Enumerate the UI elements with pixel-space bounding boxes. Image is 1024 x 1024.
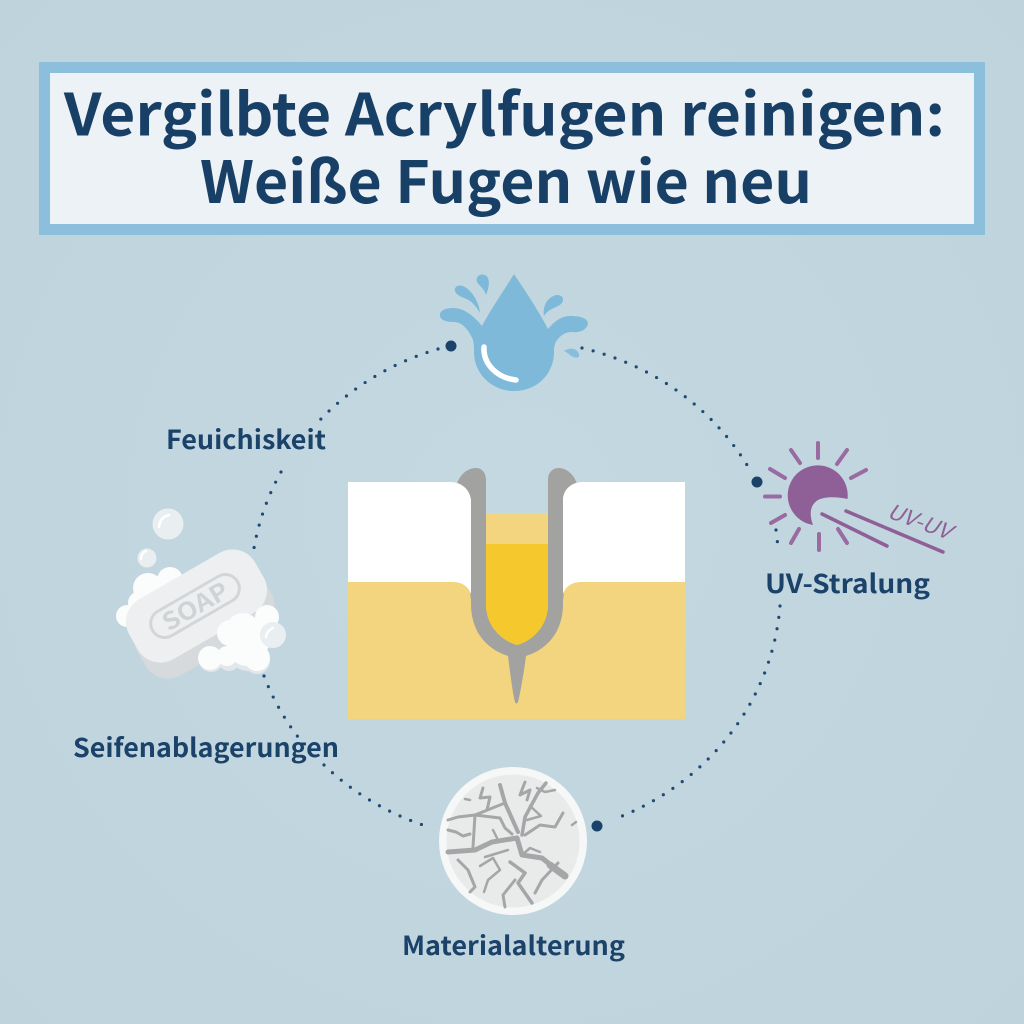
- icon: soap bar: [116, 508, 286, 688]
- UV beam label: UV-UV: [884, 495, 960, 548]
- drop highlight: [484, 347, 516, 380]
- label: Seifenablagerungen: Seifenablagerungen: [73, 728, 339, 765]
- sealant: [457, 468, 577, 704]
- bubbles: [138, 508, 286, 648]
- label: Materialalterung: Materialalterung: [402, 926, 625, 963]
- pale yellow layer: [486, 513, 548, 545]
- soap shadow: [124, 556, 284, 688]
- label: Feuchtigkeit: Feuichiskeit: [166, 420, 326, 457]
- title text: [63, 68, 945, 220]
- sun rays: [765, 443, 866, 550]
- soap suds front shadow: [199, 631, 270, 674]
- title text: Vergilbte Acrylfugen reinigen:: [63, 68, 945, 152]
- soap suds back: [116, 567, 183, 627]
- soap stamp: SOAP: [154, 572, 234, 638]
- cracks: [448, 782, 576, 907]
- white surface right: [563, 482, 685, 594]
- dotted cycle ring: [254, 348, 780, 826]
- soap suds front: [198, 605, 279, 671]
- white surface left: [348, 482, 471, 594]
- icon: cracked material disc: [439, 767, 587, 915]
- title banner: [44, 68, 980, 230]
- central joint cross-section: [348, 468, 685, 719]
- soap stamp: [143, 565, 245, 644]
- label: UV-Strahlung: UV-Stralung: [765, 564, 931, 601]
- tile body: [348, 582, 685, 719]
- ring node dots: [446, 340, 762, 832]
- icon: UV sun: [765, 443, 960, 552]
- yellow filling: [486, 544, 548, 645]
- icon: water drop with splashes: [440, 274, 588, 391]
- UV beams: [822, 511, 943, 552]
- title text: Weiße Fugen wie neu: [200, 136, 812, 220]
- soap body: [116, 540, 277, 672]
- sun crescent: [788, 465, 848, 525]
